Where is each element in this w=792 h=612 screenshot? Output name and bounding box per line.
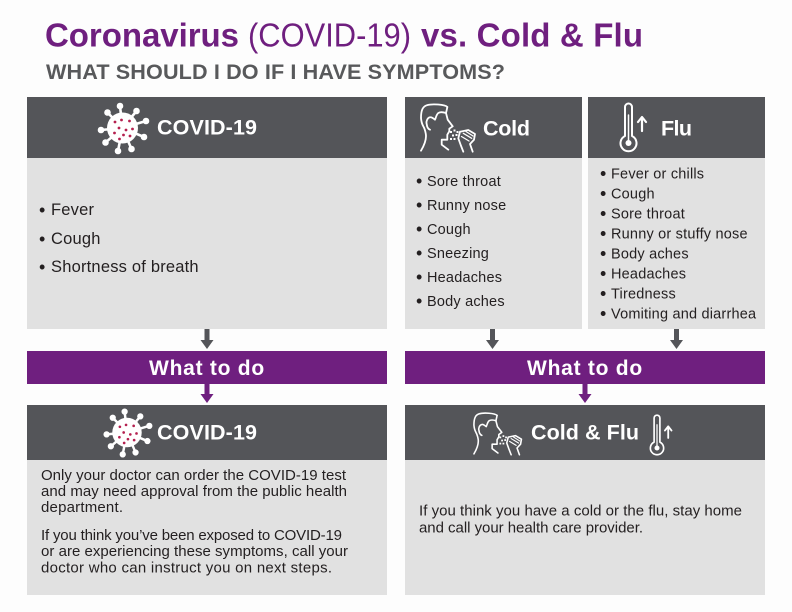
symptom list: Cold: • [416,291,423,311]
symptom list: Cold: • [416,219,423,239]
symptom list: Cold: • [416,195,423,215]
header: COVID-19 [27,97,387,158]
subtitle: WHAT SHOULD I DO IF I HAVE SYMPTOMS? [46,59,505,84]
banner: What to do (left) [27,351,387,384]
symptom list: Flu: • [600,284,607,304]
symptom list: COVID-19: • [39,229,46,249]
heading: COVID-19: COVID-19 [157,116,257,140]
symptom list: COVID-19: Cough [51,230,101,248]
symptom list: COVID-19: • [39,200,46,220]
text: testing guidance [41,467,347,516]
symptom list: Flu: Runny or stuffy nose [611,226,748,242]
panel: Flu symptoms [588,97,765,329]
header: COVID-19 action [27,405,387,460]
title: vs. Cold & Flu [421,16,643,54]
header: Flu [588,97,765,158]
symptom list: Flu: • [600,244,607,264]
symptom list: Cold: Body aches [427,294,505,310]
symptom list: Cold: Runny nose [427,198,506,214]
text: stay home guidance: and call your health care provider. [419,520,643,536]
symptom list: Cold: • [416,171,423,191]
symptom list: Cold: • [416,267,423,287]
panel: COVID-19 symptoms [27,97,387,329]
icon: person coughing [474,413,521,455]
panel: Cold and Flu action [405,405,765,595]
symptom list: Flu: Sore throat [611,206,685,222]
symptom list: Cold: Sore throat [427,174,501,190]
icon: thermometer [650,415,672,455]
text: exposure guidance: doctor who can instruct you on next steps. [41,560,332,576]
symptom list: Cold: • [416,243,423,263]
heading: COVID-19: COVID-19 [157,420,257,444]
text: stay home guidance [419,502,742,536]
symptom list: COVID-19: Fever [51,201,94,219]
heading: Cold: Cold [483,116,530,140]
text: testing guidance: department. [41,499,123,516]
title: (COVID-19) [248,16,411,54]
symptom list: Flu: • [600,184,607,204]
symptom list: Flu: Tiredness [611,286,676,302]
symptom list: COVID-19: Shortness of breath [51,258,199,276]
text: testing guidance: and may need approval from the public health [41,483,347,500]
symptom list: Flu: • [600,264,607,284]
symptom list: Cold [416,171,506,311]
banner: What to do (right): What to do [527,357,643,380]
symptom list: Flu: • [600,304,607,324]
text: exposure guidance: If you think you’ve been exposed to COVID-19 [41,527,342,544]
arrow: what to do to COVID-19 action [200,384,214,403]
symptom list: COVID-19 [39,200,199,277]
symptom list: Flu: Fever or chills [611,166,704,182]
symptom list: Flu: Vomiting and diarrhea [611,306,757,322]
header: Cold and Flu action [405,405,765,460]
text: exposure guidance [41,527,348,576]
panel: Cold symptoms [405,97,582,329]
icon: thermometer [620,104,646,151]
banner: What to do (right) [405,351,765,384]
arrow: COVID-19 to what to do [200,329,214,349]
symptom list: Flu: Headaches [611,266,686,282]
heading: Cold & Flu: Cold & Flu [531,420,639,444]
symptom list: Cold: Cough [427,222,471,238]
heading: Flu: Flu [661,116,692,140]
icon: virus [99,104,148,153]
header: Cold [405,97,582,158]
title: Coronavirus [45,16,239,54]
arrow: what to do to Cold and Flu action [578,384,592,403]
symptom list: Cold: Headaches [427,270,502,286]
text: testing guidance: Only your doctor can order the COVID-19 test [41,467,347,484]
icon: virus [105,410,151,456]
symptom list: Flu: Body aches [611,246,689,262]
symptom list: Flu: Cough [611,186,655,202]
title [45,16,643,54]
icon: person coughing [421,104,475,152]
symptom list: Flu: • [600,224,607,244]
symptom list: Flu: • [600,204,607,224]
symptom list: Cold: Sneezing [427,246,489,262]
arrow: Flu to what to do [670,329,683,349]
symptom list: COVID-19: • [39,257,46,277]
panel: COVID-19 action [27,405,387,595]
symptom list: Flu [600,164,757,324]
arrow: Cold to what to do [486,329,499,349]
text: stay home guidance: If you think you have a cold or the flu, stay home [419,502,742,520]
symptom list: Flu: • [600,164,607,184]
text: exposure guidance: or are experiencing these symptoms, call your [41,543,348,560]
banner: What to do (left): What to do [149,357,265,380]
